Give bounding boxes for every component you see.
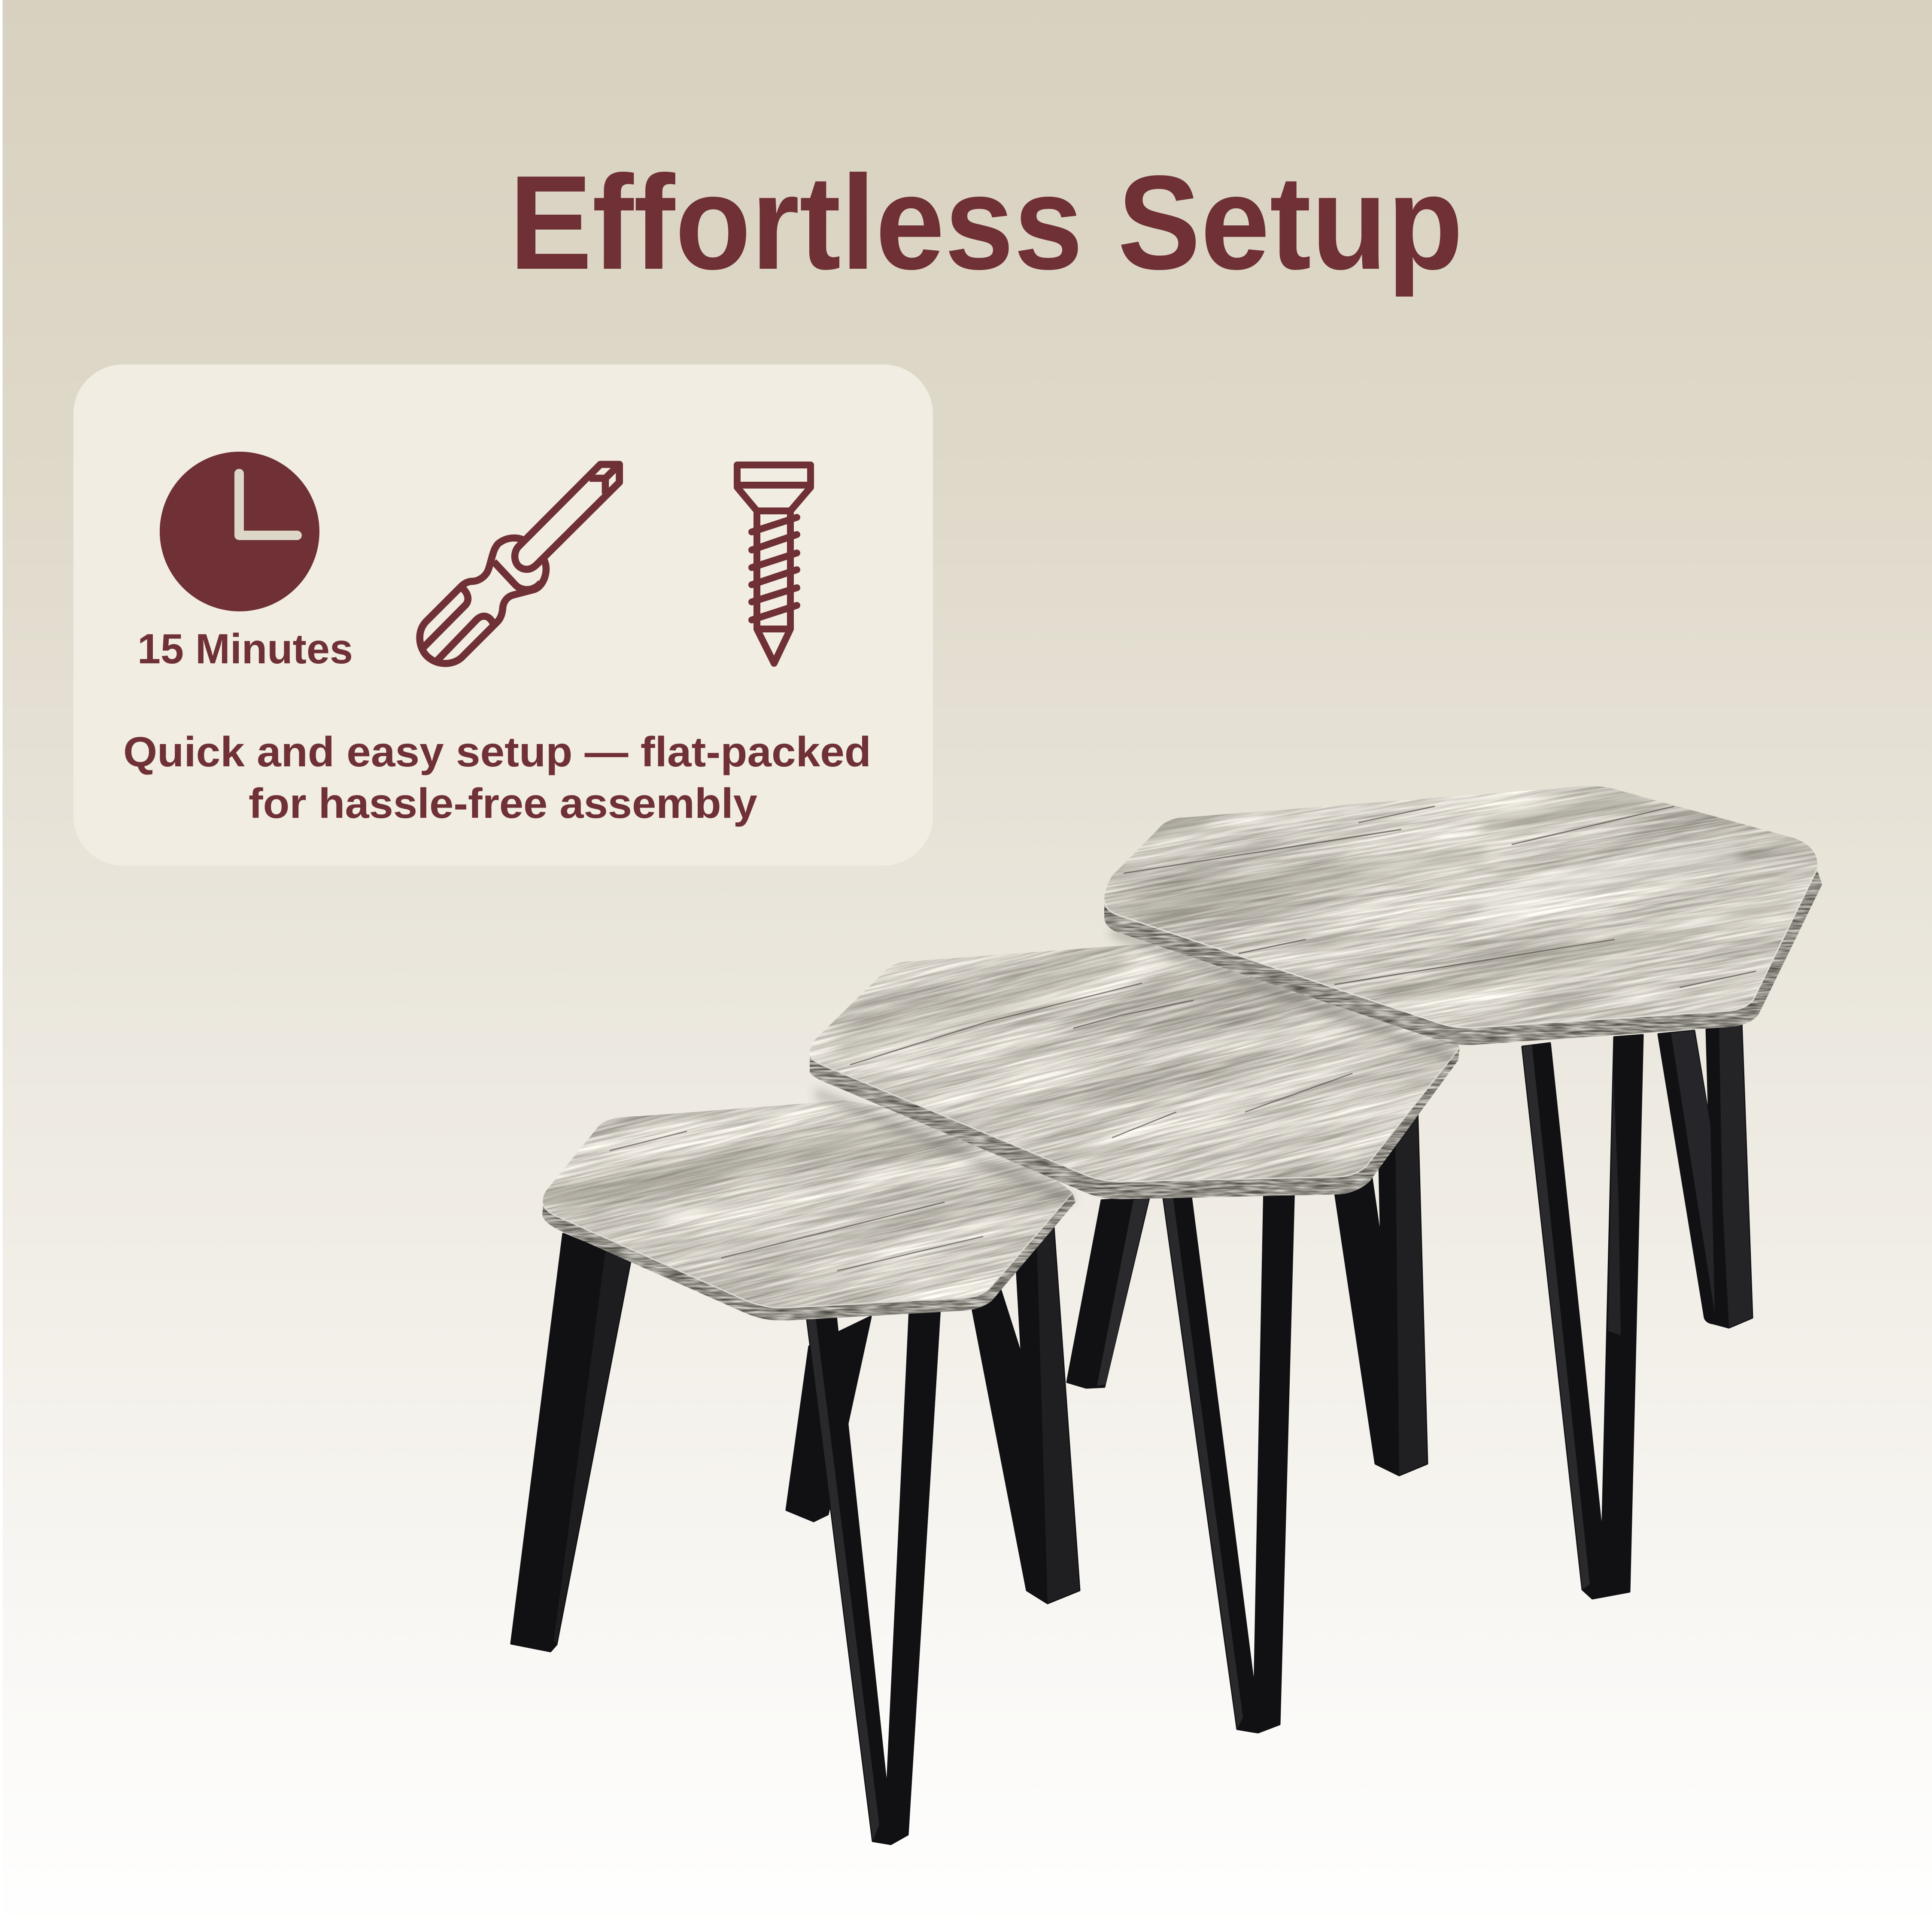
legs: small table (511, 1227, 1079, 1844)
clock label: 15 Minutes (137, 625, 353, 672)
tabletop: small table (542, 1100, 1075, 1321)
icon: clock (160, 452, 319, 611)
tabletop: large table (1104, 786, 1822, 1045)
icon: screw (737, 465, 811, 663)
shadow: medium table on small table (816, 1093, 1073, 1200)
legs: medium table (1067, 1109, 1427, 1732)
legs: large table (1522, 1022, 1752, 1598)
icon: screwdriver (420, 465, 620, 663)
panel description: Quick and easy setup — flat-packed (123, 728, 871, 775)
shadow: large table on medium table (1112, 932, 1451, 1056)
panel: setup info (73, 365, 933, 866)
panel description (123, 728, 871, 827)
title: Effortless Setup (509, 148, 1463, 298)
nesting tables product image (510, 786, 1822, 1845)
tabletop: medium table (809, 944, 1460, 1200)
panel description: for hassle-free assembly (249, 780, 757, 827)
